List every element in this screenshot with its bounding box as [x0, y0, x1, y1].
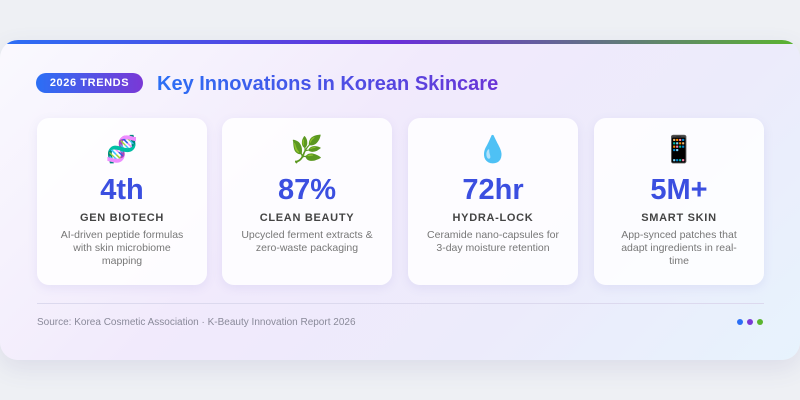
- dots: [737, 319, 763, 325]
- badge: 2026 trends: 2026 TRENDS: [50, 77, 129, 89]
- description: AI-driven peptide formulas with skin microbiome mapping: [61, 229, 183, 267]
- label: HYDRA-LOCK: [453, 212, 533, 224]
- card: gen biotech: [37, 118, 207, 285]
- source text: Source: Korea Cosmetic Association · K-Beauty Innovation Report 2026: [37, 317, 356, 328]
- icon: droplet: 💧: [477, 134, 509, 164]
- icon: phone: 📱: [663, 134, 695, 164]
- description: Ceramide nano-capsules for 3-day moisture retention: [427, 229, 559, 254]
- stat: 5M+: 5M+: [650, 174, 708, 206]
- title: Key Innovations in Korean Skincare: [157, 73, 498, 95]
- stat: 87%: 87%: [278, 174, 336, 206]
- label: SMART SKIN: [641, 212, 717, 224]
- badge: 2026 trends: [36, 73, 143, 93]
- stat: 4th: 4th: [100, 174, 144, 206]
- card: clean beauty: [222, 118, 392, 285]
- card: smart skin: [594, 118, 764, 285]
- label: CLEAN BEAUTY: [260, 212, 354, 224]
- description: Upcycled ferment extracts & zero-waste packaging: [241, 229, 373, 254]
- icon: herb: 🌿: [291, 134, 323, 164]
- main panel: [0, 40, 800, 360]
- card: hydra-lock: [408, 118, 578, 285]
- icon: dna: 🧬: [106, 134, 138, 164]
- description: App-synced patches that adapt ingredients in real-time: [621, 229, 737, 267]
- stat: 72hr: 72hr: [462, 174, 524, 206]
- label: GEN BIOTECH: [80, 212, 164, 224]
